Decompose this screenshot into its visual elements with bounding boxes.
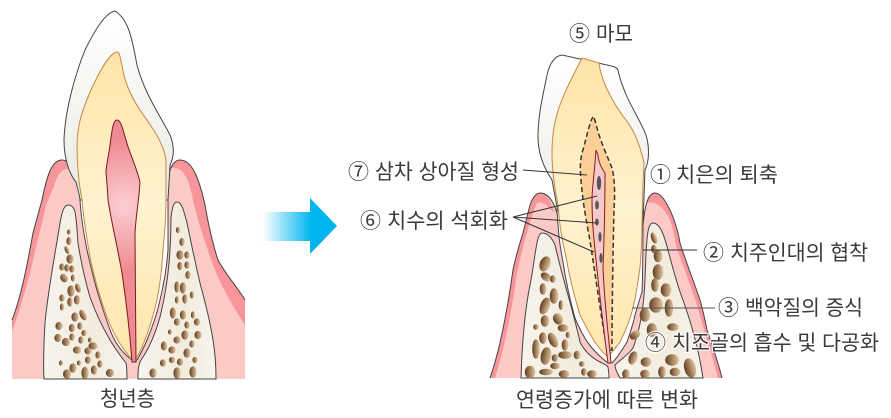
- secondary dentin, dashed: [580, 117, 615, 350]
- gum edge right: [170, 160, 245, 325]
- label 5: ⑤: [569, 23, 590, 46]
- label 2: ②: [703, 242, 724, 265]
- pulp calcifications: [595, 176, 603, 263]
- alveolar bone right aged: [615, 223, 703, 378]
- label 6: 치수의 석회화: [387, 210, 508, 233]
- label 4: ④: [645, 332, 666, 355]
- pulp aged: [592, 150, 611, 363]
- pulp: [106, 120, 140, 362]
- label 7: ⑦: [348, 161, 369, 184]
- leader lines: [513, 170, 715, 308]
- illustration: young tooth: [12, 11, 245, 379]
- root outline with ligament gap: [80, 200, 168, 360]
- dentin aged: [552, 58, 644, 357]
- enamel: [64, 11, 173, 200]
- gum edge left aged: [490, 193, 554, 378]
- label 5: 마모: [596, 23, 633, 46]
- gum tissue aged: [490, 193, 722, 378]
- alveolar bone left aged: [521, 233, 609, 378]
- bone pores young: [55, 228, 201, 378]
- label 4: 치조골의 흡수 및 다공화: [672, 332, 879, 355]
- gum edge right aged: [646, 193, 722, 378]
- dentin: [77, 52, 166, 357]
- alveolar bone right: [138, 202, 216, 379]
- label 1: 치은의 퇴축: [676, 164, 778, 187]
- arrow: [263, 198, 337, 254]
- illustration: aged tooth: [490, 55, 722, 378]
- alveolar bone left: [44, 205, 127, 379]
- bone pores aged: [526, 233, 697, 378]
- label 2: 치주인대의 협착: [730, 242, 868, 265]
- caption: young: 청년층: [100, 388, 155, 411]
- label 1: ①: [650, 164, 671, 187]
- label 7: 삼차 상아질 형성: [375, 161, 519, 184]
- label 3: ③: [718, 297, 739, 320]
- caption: aged: 연령증가에 따른 변화: [516, 389, 698, 412]
- label 6: ⑥: [360, 210, 381, 233]
- enamel aged: [538, 55, 648, 225]
- label 3: 백악질의 증식: [745, 297, 863, 320]
- exposed root and widened ligament: [557, 210, 643, 363]
- gum edge left: [12, 160, 75, 332]
- label 5: [569, 23, 633, 46]
- gum tissue young: [12, 160, 245, 379]
